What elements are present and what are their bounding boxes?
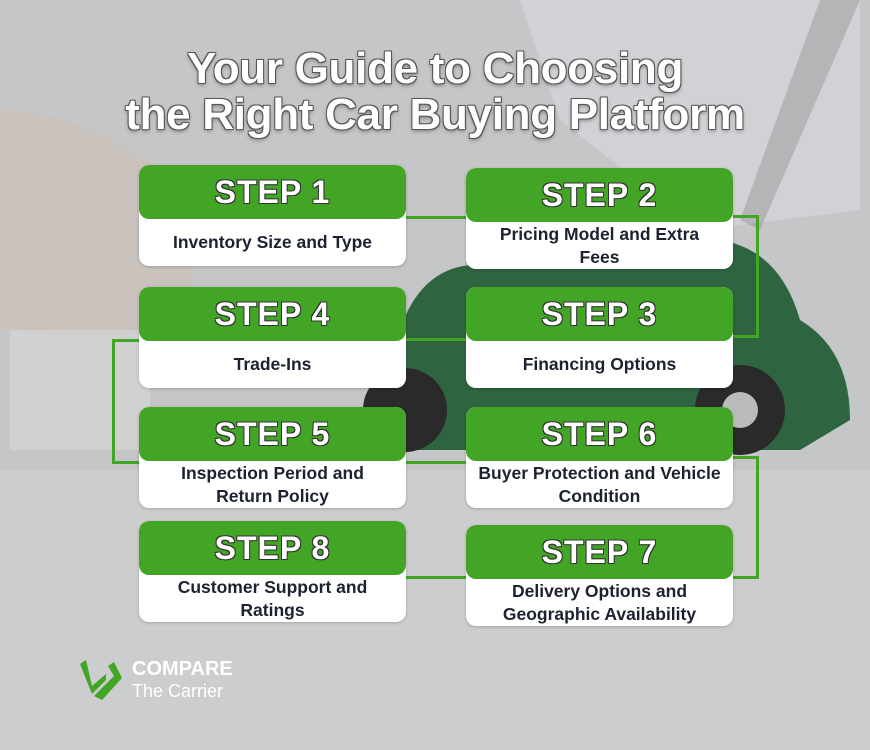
card: step 2: Pricing Model and Extra [500,224,699,244]
card: step 1 [139,165,406,266]
card: step 6: Condition [559,486,640,506]
card: step 7 [466,525,733,626]
card: step 5: STEP 5 [215,416,330,452]
card: step 4: STEP 4 [215,296,330,332]
logo: COMPARE [132,658,233,680]
card: step 7: STEP 7 [542,534,657,570]
logo [80,658,233,701]
card: step 7: Geographic Availability [503,604,696,624]
card: step 8: Ratings [240,600,305,620]
card: step 2: STEP 2 [542,177,657,213]
connectors [112,215,759,579]
title [124,44,745,142]
card: step 7: Delivery Options and [512,580,687,600]
card: step 8: STEP 8 [215,530,330,566]
card: step 4 [139,287,406,388]
card: step 8 [139,521,406,622]
card: step 5: Return Policy [216,486,329,506]
card: step 5 [139,407,406,508]
icon: logo mark [80,660,122,700]
card: step 1: STEP 1 [215,174,330,210]
card: step 1: Inventory Size and Type [173,232,372,252]
card: step 6: STEP 6 [542,416,657,452]
card: step 8: Customer Support and [178,576,367,596]
card: step 2: Fees [580,246,619,266]
logo: The Carrier [132,681,223,701]
title: Your Guide to Choosing [187,44,683,93]
card: step 4: Trade-Ins [234,354,311,374]
card: step 6: Buyer Protection and Vehicle [478,462,721,482]
card: step 3: Financing Options [523,354,676,374]
card: step 5: Inspection Period and [181,462,364,482]
card: step 6 [466,407,733,508]
card: step 2 [466,168,733,269]
card: step 3 [466,287,733,388]
card: step 3: STEP 3 [542,296,657,332]
title: the Right Car Buying Platform [125,90,745,139]
